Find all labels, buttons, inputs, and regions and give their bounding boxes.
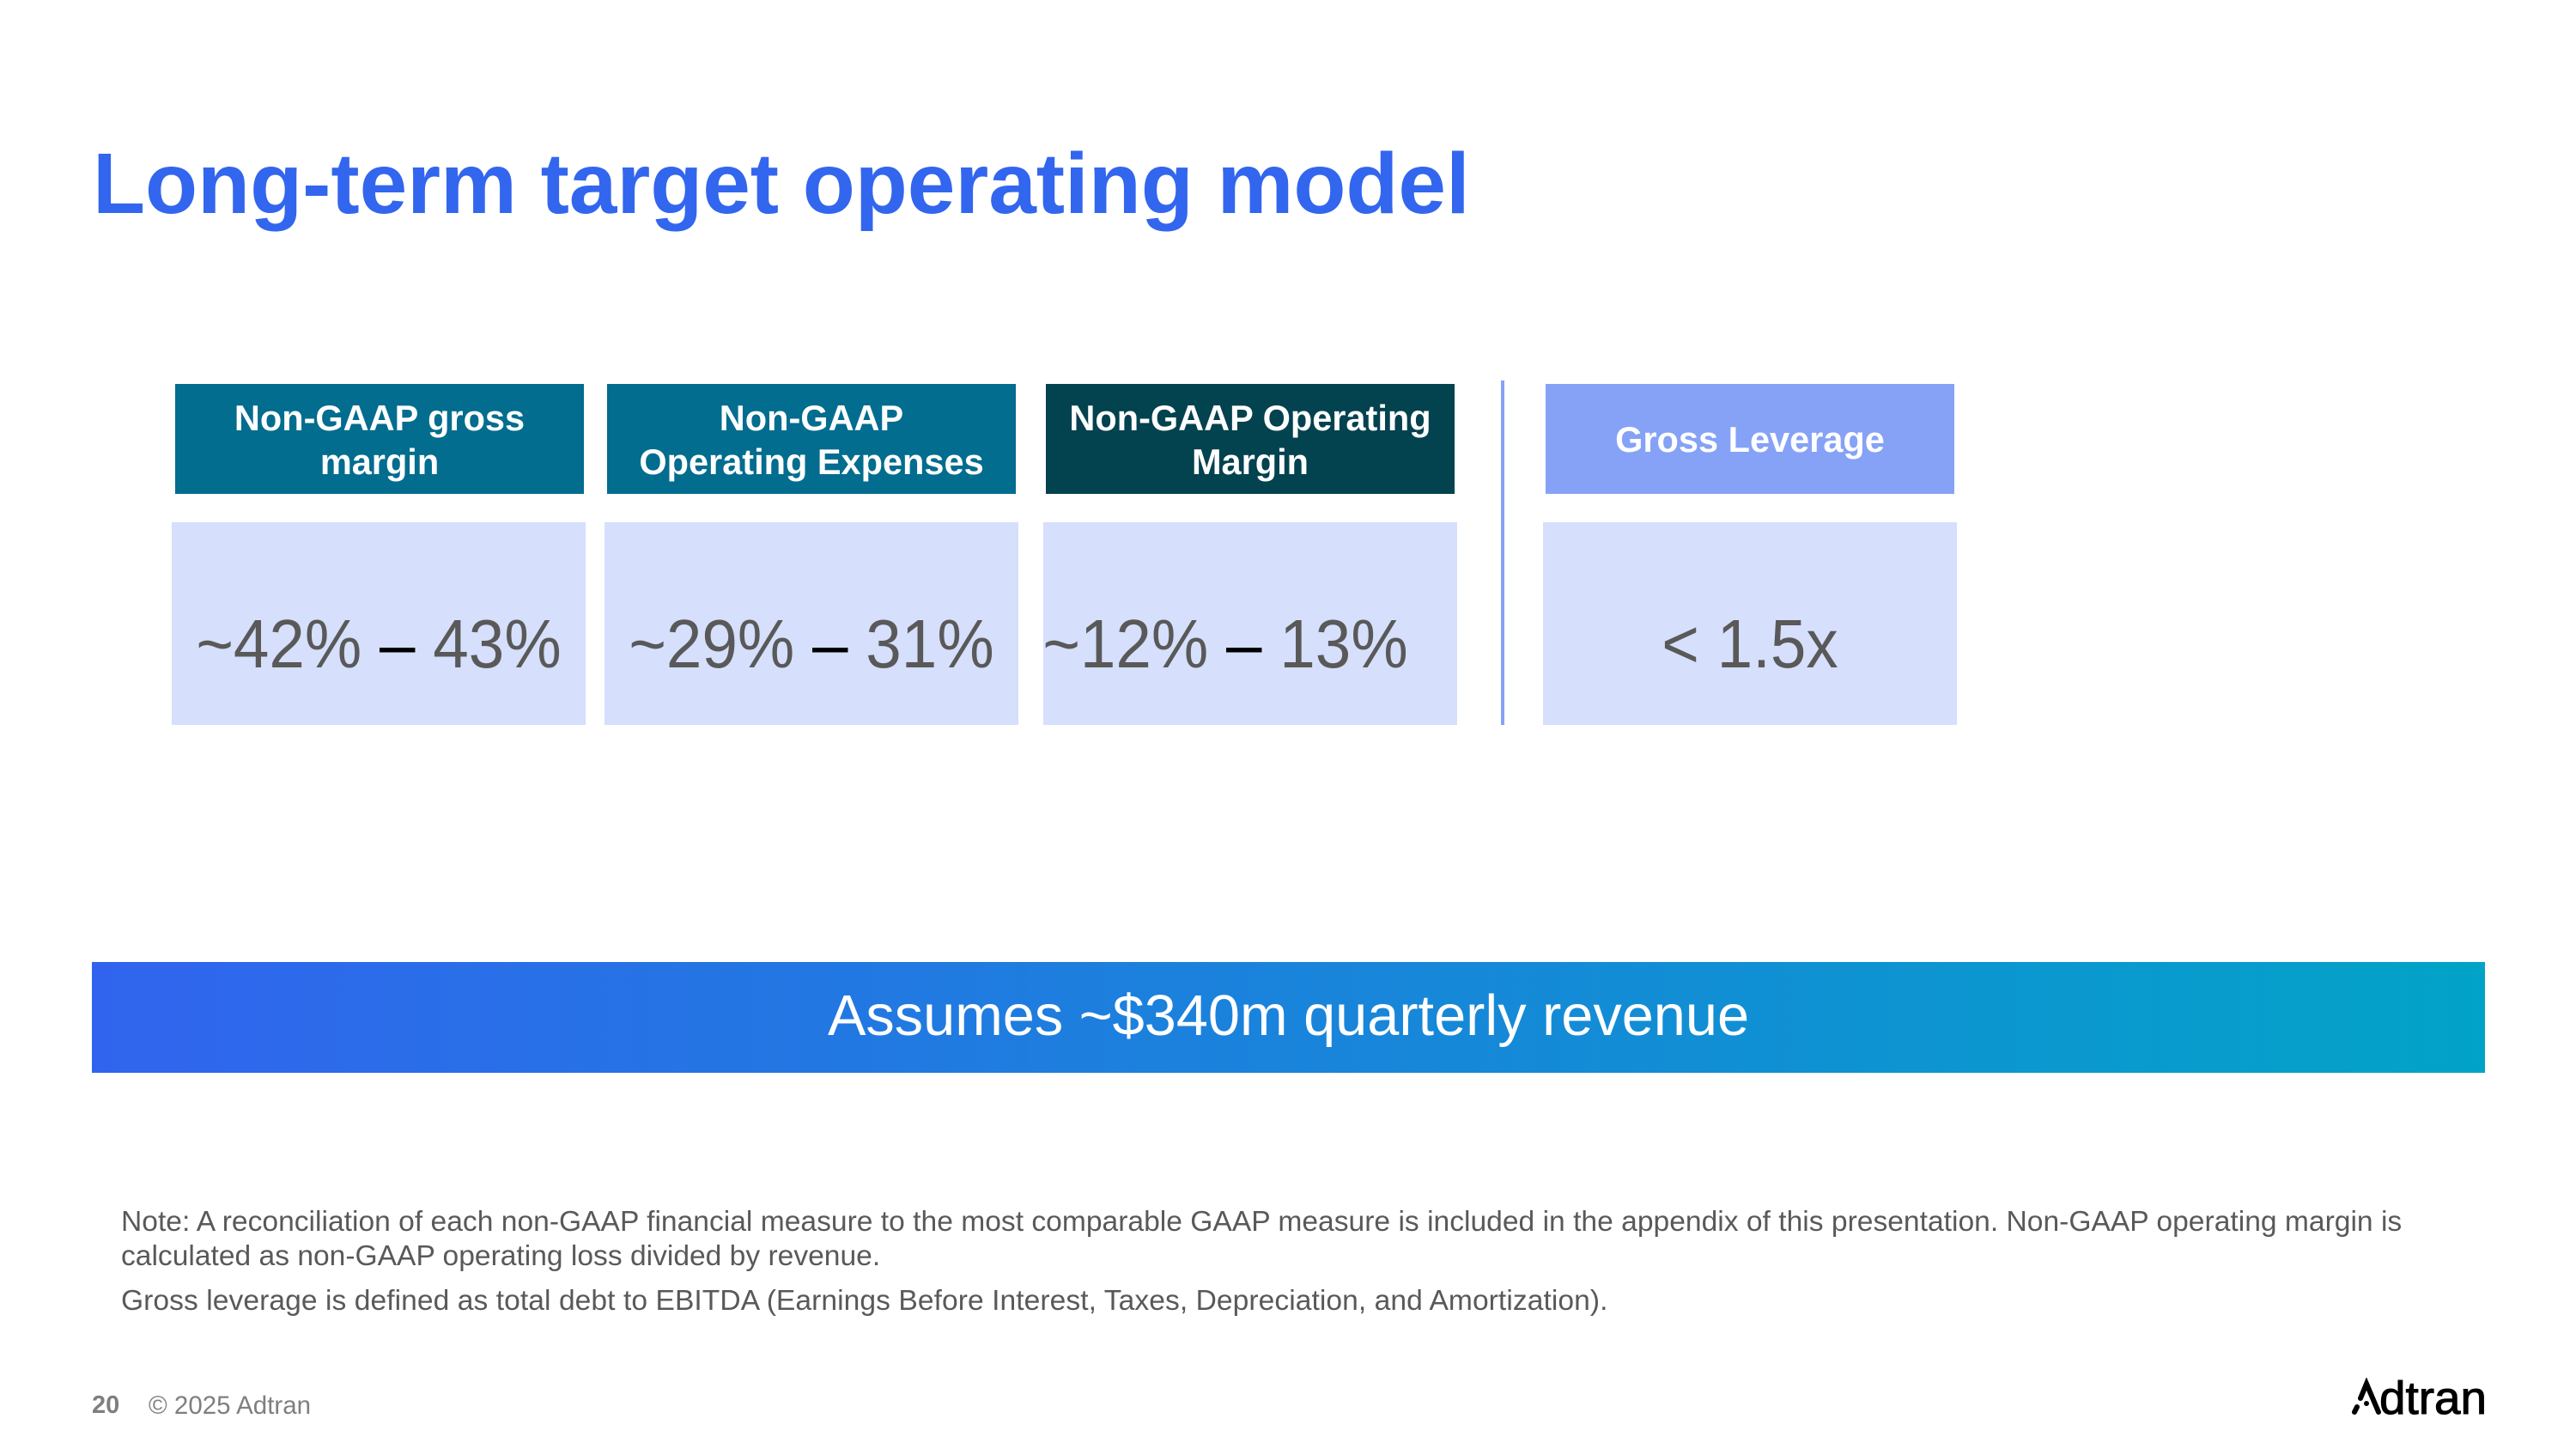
footnotes: calculated as non-GAAP operating loss divided by revenue. xyxy=(121,1240,880,1272)
footnotes: Note: A reconciliation of each non-GAAP financial measure to the most comparable GAAP measure is included in the appendix of this presentation. Non-GAAP operating margin is xyxy=(121,1206,2402,1238)
value: operating margin range: ~12% – 13% xyxy=(1042,606,1408,682)
header: non-GAAP operating expenses: Non-GAAP xyxy=(720,397,903,438)
title: Long-term target operating model xyxy=(93,136,1470,232)
footnotes: Gross leverage is defined as total debt to EBITDA (Earnings Before Interest, Taxes, Depreciation, and Amortization). xyxy=(121,1285,1607,1317)
header: non-GAAP gross margin: margin xyxy=(320,441,439,481)
header: non-GAAP operating margin: Margin xyxy=(1192,441,1309,481)
header: non-GAAP operating margin xyxy=(1046,384,1455,494)
panel: gross leverage xyxy=(1543,384,1957,725)
header: gross leverage xyxy=(1546,384,1954,494)
value: gross leverage target xyxy=(1543,522,1957,725)
footer: copyright: © 2025 Adtran xyxy=(149,1391,311,1420)
header: gross leverage: Gross Leverage xyxy=(1615,419,1885,460)
header: non-GAAP gross margin xyxy=(175,384,584,494)
icon: A mark xyxy=(2354,1384,2379,1412)
value: gross margin range: ~42% – 43% xyxy=(196,606,562,682)
banner: revenue assumption xyxy=(92,962,2485,1073)
header: non-GAAP operating margin: Non-GAAP Operating xyxy=(1069,397,1431,438)
header: non-GAAP operating expenses xyxy=(607,384,1016,494)
footnotes xyxy=(121,1206,2402,1317)
value: gross margin range xyxy=(172,522,586,725)
value: gross leverage target: < 1.5x xyxy=(1662,606,1838,682)
panel: non-GAAP operating margin xyxy=(1042,384,1457,725)
banner: revenue assumption: Assumes ~$340m quarterly revenue xyxy=(828,984,1749,1048)
value: operating expenses range: ~29% – 31% xyxy=(629,606,994,682)
panel: non-GAAP operating expenses xyxy=(605,384,1018,725)
logo: Adtran xyxy=(2351,1378,2487,1419)
header: non-GAAP gross margin: Non-GAAP gross xyxy=(234,397,525,438)
header: non-GAAP operating expenses: Operating Expenses xyxy=(639,441,984,481)
panel: non-GAAP gross margin xyxy=(172,384,586,725)
value: operating expenses range xyxy=(605,522,1018,725)
footer: page number: 20 xyxy=(92,1391,119,1419)
value: operating margin range xyxy=(1043,522,1457,725)
